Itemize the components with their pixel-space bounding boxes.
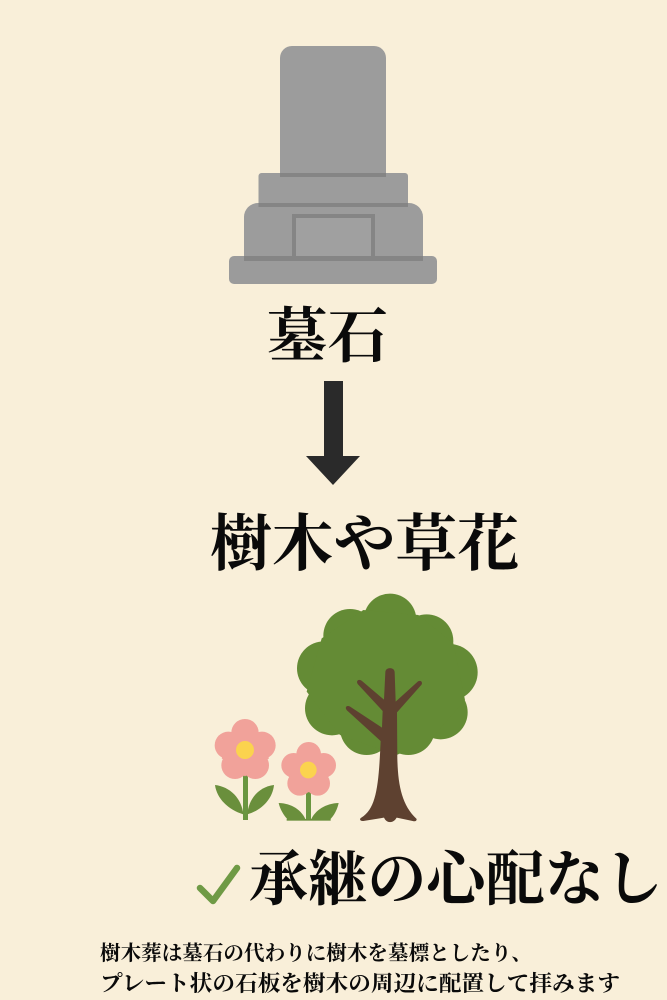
icon: gravestone (229, 46, 437, 284)
heading: trees and flowers: 樹木や草花 (210, 511, 519, 579)
text block: description (100, 942, 620, 996)
text block: description: 樹木葬は墓石の代わりに樹木を墓標としたり、 (100, 942, 532, 965)
icon: large flower (215, 719, 276, 820)
heading: no succession worries: 承継の心配なし (249, 847, 663, 913)
icon: tree (297, 594, 478, 822)
arrow: down (306, 381, 360, 485)
heading: gravestone: 墓石 (267, 304, 388, 370)
icon: small flower (279, 742, 339, 821)
text block: description: プレート状の石板を樹木の周辺に配置して拝みます (100, 971, 620, 996)
icon: check mark (200, 868, 237, 901)
